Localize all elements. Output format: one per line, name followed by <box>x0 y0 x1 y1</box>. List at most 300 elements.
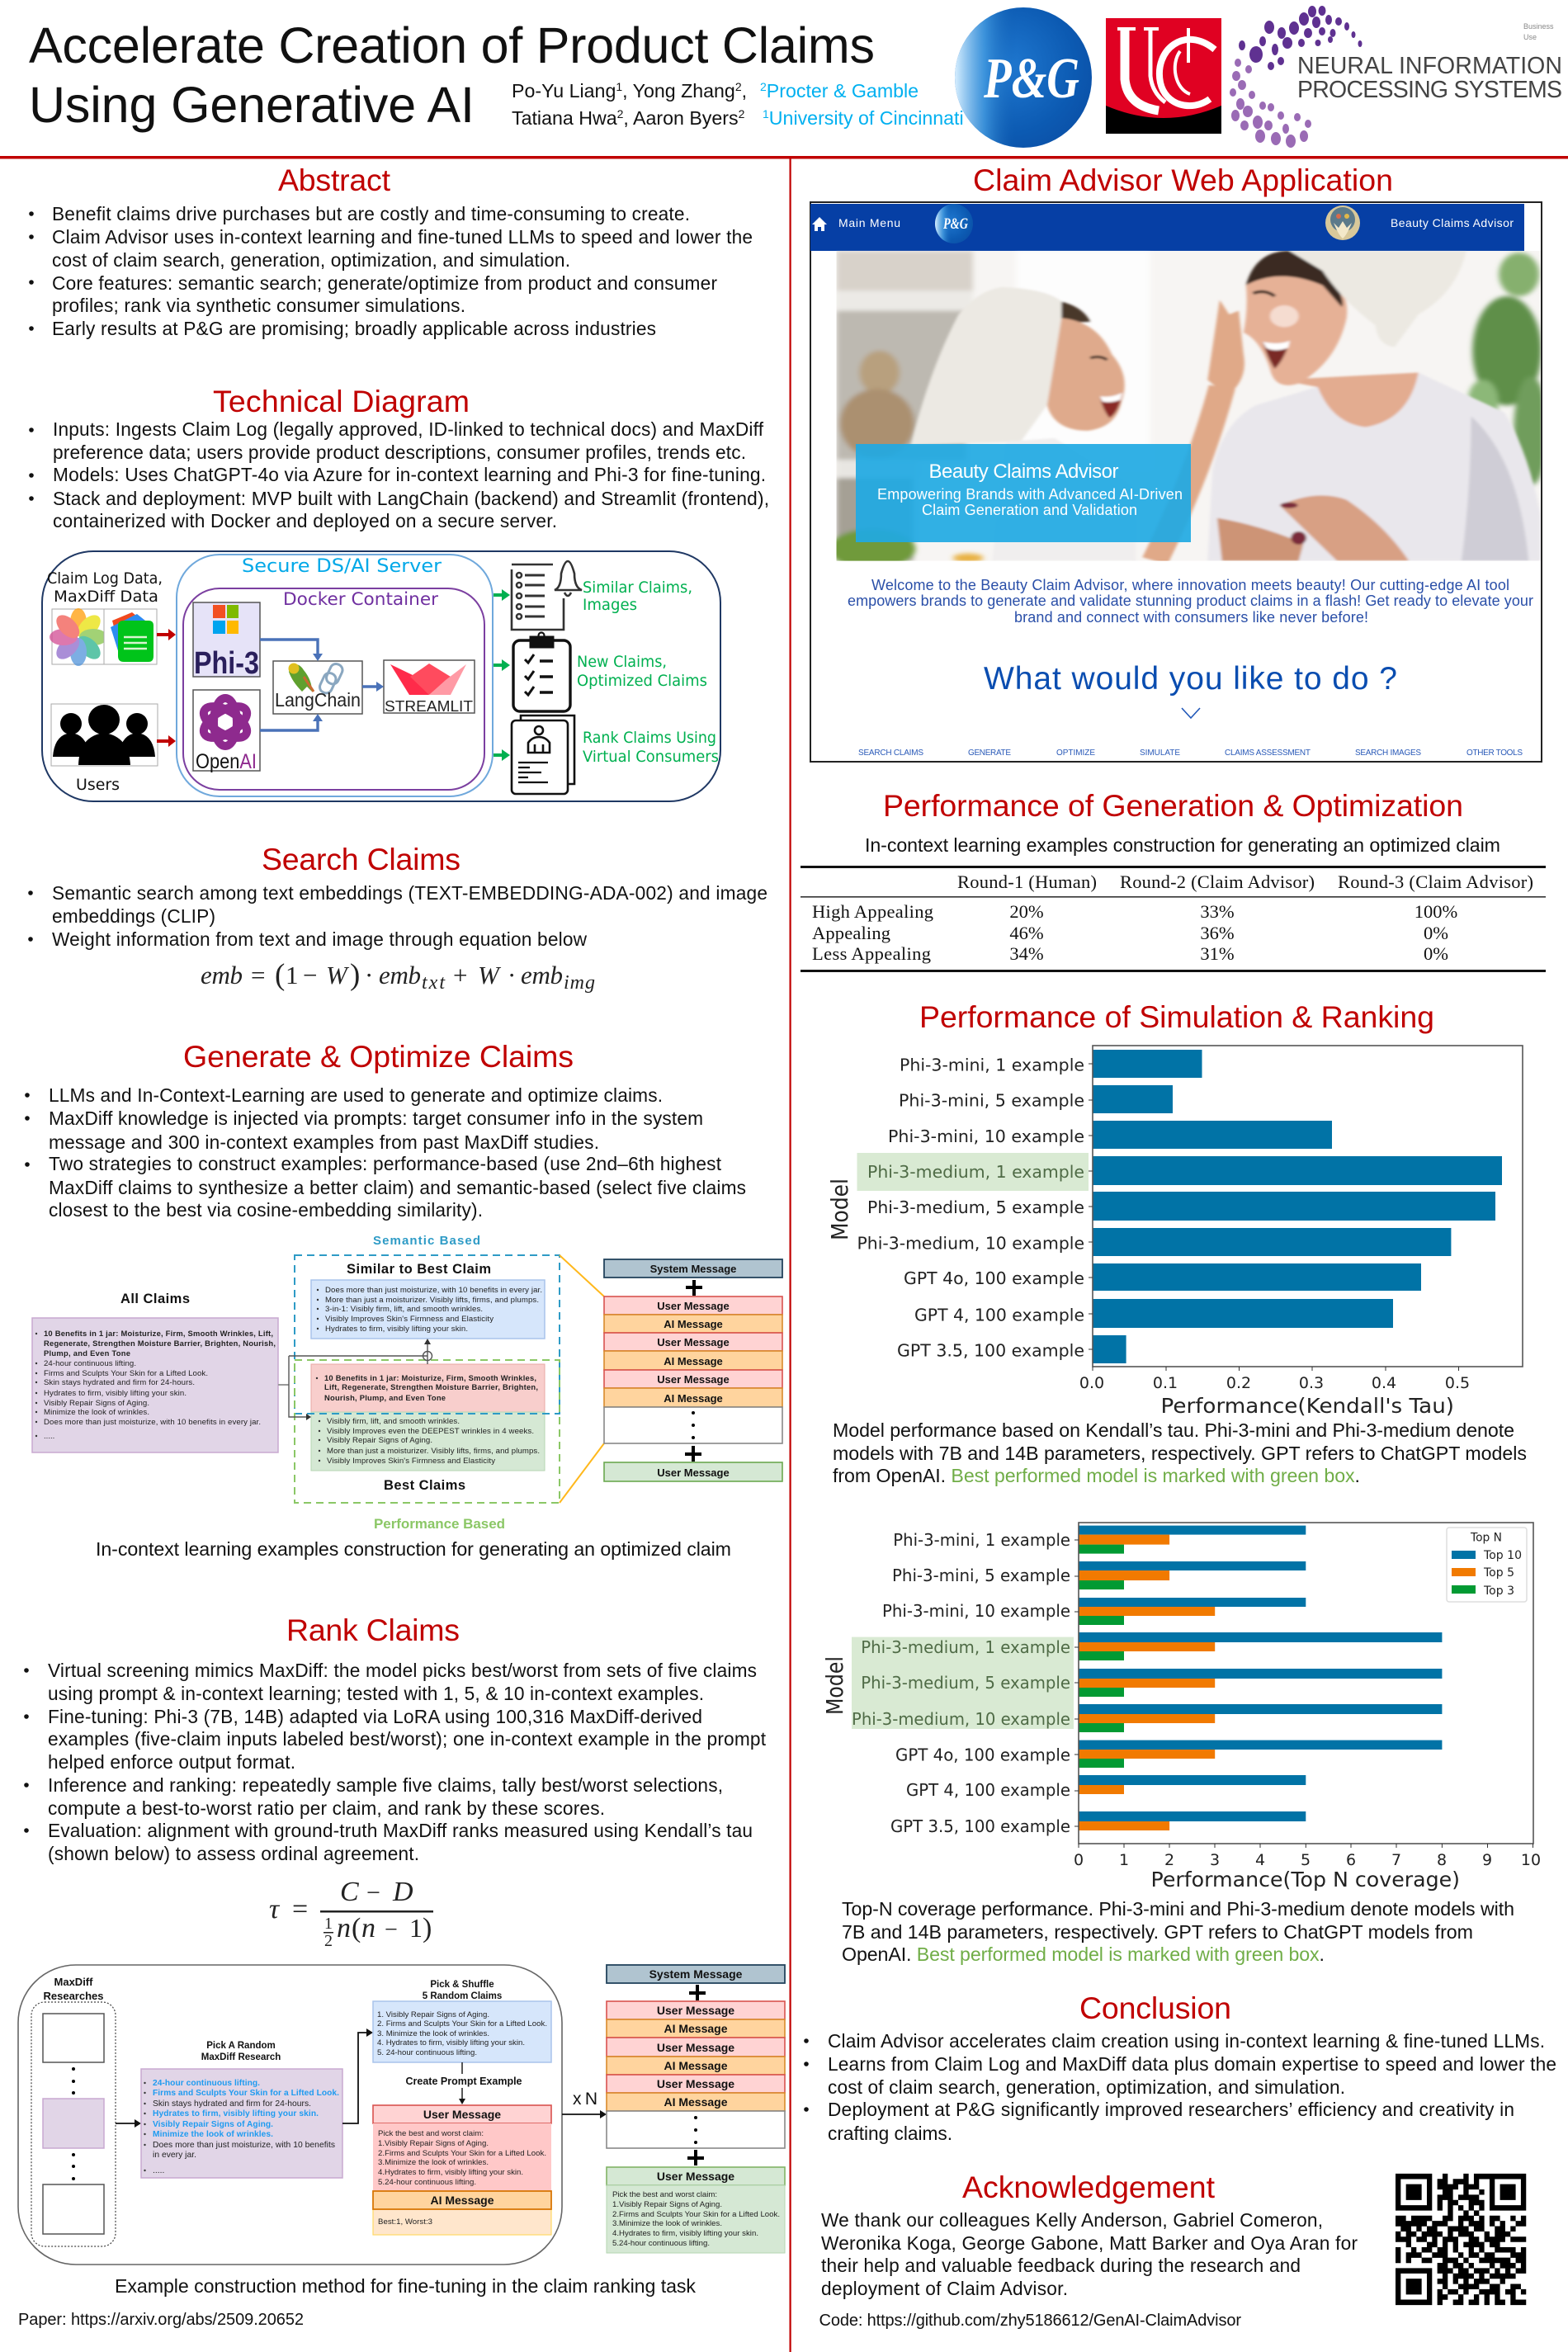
arrows: pipeline <box>260 640 384 730</box>
category labels: Phi-3-mini, 5 example <box>899 1091 1084 1111</box>
authors: 2 <box>760 80 767 93</box>
table: 0% <box>1424 943 1448 964</box>
text block: preference data; users provide product descriptions, consumer profiles, trends etc. <box>53 442 746 463</box>
label: pick and shuffle: Pick & Shuffle <box>430 1980 494 1990</box>
icon: photos <box>50 608 107 666</box>
equation: embedding <box>201 958 595 994</box>
authors: 1 <box>763 107 769 120</box>
category labels: Phi-3-mini, 1 example <box>900 1055 1084 1074</box>
text block: cost of claim search, generation, optimization, and simulation. <box>828 2076 1345 2098</box>
logo: NeurIPS <box>1230 6 1562 148</box>
equation: embedding: txt <box>422 972 446 994</box>
icon: users <box>51 704 158 766</box>
text block: Models: Uses ChatGPT-4o via Azure for in-context learning and Phi-3 for fine-tuning. <box>53 464 766 485</box>
icon: clipboard checklist <box>513 632 570 711</box>
docker label: Docker Container <box>283 589 438 609</box>
output labels: Virtual Consumers <box>583 748 719 766</box>
panel: prompt example: 1.Visibly Repair Signs of Aging. <box>378 2139 489 2148</box>
category labels: Phi-3-mini, 1 example <box>893 1530 1070 1550</box>
table: 31% <box>1200 943 1235 964</box>
legend: Top N <box>1470 1532 1502 1545</box>
category labels: Phi-3-medium, 10 example <box>852 1709 1070 1729</box>
logo: P&G <box>955 7 1092 148</box>
text block <box>804 2030 1556 2144</box>
callout: beauty claims advisor banner: Empowering Brands with Advanced AI-Driven <box>877 486 1183 503</box>
caption: Kendall's tau <box>833 1419 1527 1486</box>
best model highlight <box>857 1153 1089 1191</box>
caption: Top-N coverage <box>842 1898 1514 1965</box>
caption: Kendall's tau: models with 7B and 14B parameters, respectively. GPT refers to ChatGPT models <box>833 1443 1527 1464</box>
panel: acknowledgement <box>819 2170 1358 2330</box>
y axis title: Model <box>826 1178 853 1240</box>
message stack: 5.24-hour continuous lifting. <box>612 2239 710 2248</box>
caption: fine-tuning construction: Example construction method for fine-tuning in the claim ranking task <box>115 2275 696 2297</box>
text block: cost of claim search, generation, optimization, and simulation. <box>52 249 570 271</box>
equation: embedding: W <box>478 961 502 989</box>
table: Less Appealing <box>812 943 931 964</box>
message stack: 2.Firms and Sculpts Your Skin for a Lifted Look. <box>612 2210 780 2219</box>
equation: embedding: ) <box>350 958 360 992</box>
equation: embedding: · <box>365 961 373 989</box>
authors: 1 <box>616 80 622 93</box>
message stack <box>604 1259 782 1481</box>
equation: Kendall's tau: = <box>292 1894 308 1925</box>
x axis ticks: 1 <box>1119 1851 1129 1869</box>
icon: chevron <box>1182 708 1200 718</box>
text block: closest to the best via cosine-embedding similarity). <box>49 1199 483 1221</box>
authors: 2 <box>735 80 742 93</box>
app header bar <box>810 204 1524 251</box>
x axis ticks: 8 <box>1437 1851 1447 1869</box>
server label: Secure DS/AI Server <box>242 556 442 577</box>
equation: embedding: emb <box>201 961 243 989</box>
legend: Top 5 <box>1483 1566 1514 1580</box>
authors: 2 <box>617 107 624 120</box>
output labels: Images <box>583 596 637 614</box>
panel: all claims: Regenerate, Strengthen Moisture Barrier, Brighten, Nourish, <box>44 1339 276 1348</box>
QR code <box>1396 2176 1526 2302</box>
panel: all claims <box>32 1318 278 1452</box>
text block: Core features: semantic search; generate/optimize from product and consumer <box>52 272 717 294</box>
logo: NeurIPS: NEURAL INFORMATION <box>1297 53 1562 79</box>
text block <box>29 203 753 339</box>
table: Round-3 (Claim Advisor) <box>1338 871 1533 892</box>
text block: Deployment at P&G significantly improved researchers’ efficiency and creativity in <box>828 2099 1514 2120</box>
text block: profiles; rank via synthetic consumer simulations. <box>52 295 465 316</box>
equation: embedding: img <box>564 972 595 994</box>
message stack: AI Message <box>664 2059 728 2072</box>
icon: resume <box>512 716 574 794</box>
text block: Benefit claims drive purchases but are costly and time-consuming to create. <box>52 203 690 224</box>
category labels: Phi-3-medium, 10 example <box>857 1234 1084 1254</box>
chart: fine-tuning example construction <box>18 1965 785 2265</box>
performance label: Performance Based <box>374 1516 505 1532</box>
text block: compute a best-to-worst ratio per claim, and rank by these scores. <box>48 1797 605 1819</box>
app navigation: SEARCH IMAGES <box>1355 749 1421 758</box>
x axis ticks: 0.0 <box>1079 1374 1104 1392</box>
caption: Kendall's tau: Model performance based on Kendall’s tau. Phi-3-mini and Phi-3-medium denote <box>833 1419 1514 1441</box>
equation: Kendall's tau: τ <box>269 1894 281 1925</box>
panel: random research claims: Hydrates to firm, visibly lifting your skin. <box>153 2109 319 2118</box>
heading: Conclusion <box>1079 1991 1231 2025</box>
equation: Kendall's tau: 1 <box>409 1913 423 1943</box>
heading: Technical Diagram <box>213 384 470 418</box>
zoom lines <box>560 1255 604 1503</box>
equation: embedding: − <box>303 961 317 989</box>
x axis ticks: 4 <box>1255 1851 1265 1869</box>
authors: , Yong Zhang <box>622 80 735 102</box>
title: Accelerate Creation of Product Claims <box>29 17 875 73</box>
logo: P&G: P&G <box>983 47 1079 111</box>
text block: Learns from Claim Log and MaxDiff data plus domain expertise to speed and lower the <box>828 2053 1556 2075</box>
message stack: User Message <box>657 2004 734 2017</box>
panel: all claims: 10 Benefits in 1 jar: Moisturize, Firm, Smooth Wrinkles, Lift, <box>44 1329 273 1338</box>
panel: prompt example: 4.Hydrates to firm, visibly lifting your skin. <box>378 2168 523 2177</box>
panel: random research claims: in every jar. <box>153 2151 196 2160</box>
heading: Abstract <box>278 163 391 197</box>
table: 34% <box>1009 943 1044 964</box>
heading: Rank Claims <box>286 1613 460 1647</box>
panel: conclusion <box>804 1991 1556 2144</box>
text block: LLMs and In-Context-Learning are used to generate and optimize claims. <box>49 1084 663 1106</box>
panel: prompt example: Best:1, Worst:3 <box>378 2217 432 2227</box>
chart: technical architecture diagram <box>42 551 720 801</box>
output labels: Rank Claims Using <box>583 729 716 747</box>
logo: NeurIPS: PROCESSING SYSTEMS <box>1297 77 1562 103</box>
panel: best claim highlighted: Nourish, Plump, and Even Tone <box>324 1393 446 1402</box>
message stack: AI Message <box>664 1392 723 1405</box>
panel: five random claims <box>373 2001 551 2062</box>
legend <box>1447 1528 1527 1602</box>
text block: Claim Advisor accelerates claim creation using in-context learning & fine-tuned LLMs. <box>828 2030 1545 2052</box>
table: 33% <box>1200 901 1235 922</box>
x axis ticks: 0.1 <box>1153 1374 1178 1392</box>
equation: Kendall's tau <box>269 1877 433 1950</box>
x axis ticks: 9 <box>1482 1851 1492 1869</box>
welcome text <box>848 577 1533 626</box>
panel: all claims: 24-hour continuous lifting. <box>44 1359 136 1368</box>
panel: search claims <box>28 842 767 994</box>
equation: Kendall's tau: C <box>340 1877 359 1907</box>
label: pick a random <box>201 2041 281 2062</box>
text block: Evaluation: alignment with ground-truth MaxDiff ranks measured using Kendall’s tau <box>48 1820 753 1841</box>
panel: best claims: Best Claims <box>384 1478 465 1493</box>
series: Top 3 <box>1079 1545 1124 1768</box>
panel: rank claims <box>24 1613 767 1950</box>
message stack: User Message <box>657 2077 734 2090</box>
output labels: New Claims, <box>577 653 667 671</box>
x axis title: Performance(Top N coverage) <box>1150 1868 1460 1892</box>
heading: Search Claims <box>262 842 460 876</box>
bar chart: Kendall's tau <box>826 1046 1523 1418</box>
component: Streamlit <box>384 660 475 715</box>
category labels: Phi-3-mini, 10 example <box>882 1601 1070 1621</box>
message stack: Pick the best and worst claim: <box>612 2190 717 2199</box>
message stack: System Message <box>649 1967 743 1981</box>
title: Using Generative AI <box>29 77 475 133</box>
semantic label: Semantic Based <box>373 1234 480 1248</box>
text block <box>28 882 767 950</box>
arrow: times N <box>562 2090 607 2118</box>
component: OpenAI: OpenAI <box>196 750 257 773</box>
arrows: inputs <box>157 629 176 747</box>
table: Round-2 (Claim Advisor) <box>1120 871 1315 892</box>
app navigation: CLAIMS ASSESSMENT <box>1225 749 1311 758</box>
arrow: to shuffled claims <box>342 2028 373 2123</box>
icon: emblem <box>1325 205 1360 240</box>
panel: similar to best claim <box>311 1262 545 1339</box>
x axis ticks: 2 <box>1164 1851 1174 1869</box>
text block: Early results at P&G are promising; broadly applicable across industries <box>52 318 656 339</box>
text block: MaxDiff knowledge is injected via prompts: target consumer info in the system <box>49 1108 703 1129</box>
arrow: create prompt example <box>406 2062 522 2104</box>
panel: five random claims: 4. Hydrates to firm, visibly lifting your skin. <box>377 2038 525 2047</box>
table <box>801 866 1546 972</box>
panel: random research claims: 24-hour continuous lifting. <box>153 2079 260 2088</box>
category labels: GPT 4o, 100 example <box>904 1268 1084 1288</box>
message stack: User Message <box>657 1373 730 1386</box>
text block: MaxDiff claims to synthesize a better claim) and semantic-based (select five claims <box>49 1177 746 1198</box>
equation: Kendall's tau: 1 <box>324 1915 333 1933</box>
text block <box>821 2209 1358 2299</box>
equation: Kendall's tau: − <box>385 1917 398 1943</box>
screenshot frame <box>810 202 1542 762</box>
category labels <box>852 1530 1070 1836</box>
x axis ticks: 0 <box>1074 1851 1084 1869</box>
message stack: System Message <box>650 1263 736 1275</box>
panel: performance of generation and optimization <box>801 788 1546 972</box>
heading: Performance of Generation & Optimization <box>883 788 1463 823</box>
panel: prompt example: Pick the best and worst claim: <box>378 2129 484 2138</box>
category labels: Phi-3-medium, 1 example <box>867 1162 1084 1182</box>
caption: Top-N coverage: OpenAI. Best performed model is marked with green box. <box>842 1943 1325 1965</box>
text block: containerized with Docker and deployed on a secure server. <box>53 510 557 531</box>
x axis title: Performance(Kendall's Tau) <box>1160 1394 1454 1418</box>
panel: similar to best claim: Similar to Best Claim <box>347 1262 491 1277</box>
message stack: 3.Minimize the look of wrinkles. <box>612 2219 722 2228</box>
authors: 2 <box>739 107 745 120</box>
panel: random research claims: Minimize the look of wrinkles. <box>153 2130 273 2139</box>
equation: embedding: ( <box>275 958 285 992</box>
panel: best claims: Visibly Improves Skin's Firmness and Elasticity <box>327 1457 495 1466</box>
x axis ticks: 7 <box>1391 1851 1401 1869</box>
text block: Weronika Koga, George Gabone, Matt Barker and Oya Aran for <box>821 2232 1358 2254</box>
panel: similar to best claim: Visibly Improves Skin's Firmness and Elasticity <box>325 1315 494 1324</box>
x axis ticks: 10 <box>1521 1851 1541 1869</box>
panel: similar to best claim: Does more than just moisturize, with 10 benefits in every jar. <box>325 1286 542 1295</box>
callout: beauty claims advisor banner: Claim Generation and Validation <box>922 502 1137 518</box>
message stack: AI Message <box>664 2095 728 2109</box>
output labels <box>577 579 719 766</box>
icon: documents <box>104 609 157 664</box>
panel: random research claims: Skin stays hydrated and firm for 24-hours. <box>153 2099 311 2109</box>
category labels <box>857 1055 1084 1361</box>
app navigation: OTHER TOOLS <box>1466 749 1523 758</box>
icon: list with bell <box>512 561 582 630</box>
panel: five random claims: 1. Visibly Repair Signs of Aging. <box>377 2010 489 2019</box>
data label: Claim Log Data, <box>47 569 163 588</box>
message stack: 1.Visibly Repair Signs of Aging. <box>612 2200 722 2209</box>
dashed selection frames <box>295 1255 560 1503</box>
label: pick and shuffle <box>423 1980 502 2001</box>
x axis ticks: 6 <box>1346 1851 1356 1869</box>
text block: using prompt & in-context learning; tested with 1, 5, & 10 in-context examples. <box>48 1683 704 1704</box>
prompt heading: What would you like to do ? <box>984 661 1397 697</box>
text block: Two strategies to construct examples: performance-based (use 2nd–6th highest <box>49 1153 722 1174</box>
message stack: User Message <box>657 1466 730 1479</box>
equation: Kendall's tau: n <box>337 1913 351 1943</box>
x axis ticks: 0.3 <box>1299 1374 1324 1392</box>
authors: , <box>742 80 747 102</box>
arrow: pick research <box>116 2119 141 2128</box>
panel: random research claims: ..... <box>153 2166 164 2175</box>
heading: Acknowledgement <box>962 2170 1216 2204</box>
caption: Top-N coverage: Top-N coverage performance. Phi-3-mini and Phi-3-medium denote models with <box>842 1898 1514 1920</box>
caption: Top-N coverage: 7B and 14B parameters, respectively. GPT refers to ChatGPT models from <box>842 1921 1473 1943</box>
authors: University of Cincinnati <box>769 107 964 129</box>
label: MaxDiff researches <box>43 1976 104 2002</box>
category labels: Phi-3-mini, 10 example <box>888 1126 1084 1146</box>
panel: best claims: Visibly Improves even the DEEPEST wrinkles in 4 weeks. <box>327 1427 534 1436</box>
message stack <box>607 1965 785 2253</box>
text block: Weight information from text and image through equation below <box>52 928 588 950</box>
x axis ticks: 5 <box>1301 1851 1311 1869</box>
panel: all claims: Hydrates to firm, visibly lifting your skin. <box>44 1389 187 1398</box>
text block: Stack and deployment: MVP built with LangChain (backend) and Streamlit (frontend), <box>53 488 769 509</box>
category labels: Phi-3-medium, 5 example <box>861 1673 1070 1693</box>
panel: all claims: Does more than just moisturize, with 10 benefits in every jar. <box>44 1418 261 1427</box>
equation: embedding: + <box>453 961 467 989</box>
equation: Kendall's tau: D <box>392 1877 413 1907</box>
photo: mother and daughter <box>829 251 1548 569</box>
category labels: GPT 3.5, 100 example <box>890 1816 1070 1836</box>
panel: prompt example <box>373 2105 551 2235</box>
welcome text: empowers brands to generate and validate stunning product claims in a flash! Get ready to elevate your <box>848 593 1533 609</box>
panel: prompt example: User Message <box>423 2108 501 2121</box>
table: 46% <box>1009 923 1044 943</box>
icon: home <box>812 217 827 231</box>
caption: Kendall's tau: from OpenAI. Best performed model is marked with green box. <box>833 1465 1360 1486</box>
equation: Kendall's tau: ( <box>352 1913 361 1943</box>
panel: best claims <box>311 1412 545 1493</box>
text block <box>24 1660 767 1864</box>
legend: Top 3 <box>1483 1585 1514 1598</box>
category labels: Phi-3-mini, 5 example <box>892 1566 1070 1585</box>
chart: in-context example construction <box>32 1234 782 1532</box>
code link: Code: https://github.com/zhy5186612/GenAI-ClaimAdvisor <box>819 2312 1241 2330</box>
text block: embeddings (CLIP) <box>52 905 215 927</box>
authors: Po-Yu Liang <box>512 80 616 102</box>
panel: random research claims: Firms and Sculpts Your Skin for a Lifted Look. <box>153 2089 339 2098</box>
text block <box>29 418 769 531</box>
connector arrows <box>278 1339 432 1420</box>
panel: best claim highlighted <box>311 1364 545 1412</box>
table: Appealing <box>812 923 890 943</box>
table: 100% <box>1415 901 1457 922</box>
panel: prompt example: AI Message <box>430 2194 494 2207</box>
text block: crafting claims. <box>828 2123 952 2144</box>
x axis ticks: 3 <box>1210 1851 1220 1869</box>
category labels: GPT 4, 100 example <box>914 1306 1084 1325</box>
message stack: 4.Hydrates to firm, visibly lifting your skin. <box>612 2229 758 2238</box>
caption: In-context learning examples construction for generating an optimized claim <box>865 834 1500 856</box>
arrow: times N: x N <box>573 2090 597 2109</box>
series: Top 10 <box>1079 1526 1442 1821</box>
logo: University of Cincinnati <box>1106 18 1221 134</box>
text block: Inference and ranking: repeatedly sample five claims, tally best/worst selections, <box>48 1774 723 1796</box>
logo: NeurIPS: Use <box>1523 33 1537 41</box>
panel: all claims: Plump, and Even Tone <box>44 1348 130 1358</box>
authors: Procter & Gamble <box>767 80 919 102</box>
panel: similar to best claim: More than just a moisturizer. Visibly lifts, firms, and plumps. <box>325 1296 539 1305</box>
arrows: outputs <box>494 589 510 761</box>
panel: abstract <box>29 163 753 339</box>
data label: MaxDiff Data <box>54 588 158 606</box>
panel: five random claims: 3. Minimize the look of wrinkles. <box>377 2029 489 2038</box>
text block: Claim Advisor uses in-context learning and fine-tuned LLMs to speed and lower the <box>52 226 753 248</box>
component: OpenAI <box>193 690 260 773</box>
label: pick and shuffle: 5 Random Claims <box>423 1991 502 2001</box>
category labels: Phi-3-medium, 1 example <box>861 1637 1070 1657</box>
app header bar: Beauty Claims Advisor <box>1391 216 1514 229</box>
x axis ticks: 0.2 <box>1226 1374 1251 1392</box>
equation: embedding: · <box>508 961 516 989</box>
title <box>29 17 875 133</box>
category labels: GPT 3.5, 100 example <box>897 1341 1084 1361</box>
message stack: User Message <box>657 2041 734 2054</box>
panel: random research claims: Does more than just moisturize, with 10 benefits <box>153 2141 335 2150</box>
equation: Kendall's tau: ) <box>423 1913 432 1943</box>
x axis ticks <box>1079 1064 1470 1392</box>
component: Phi-3: Phi-3 <box>194 646 259 681</box>
app navigation: SIMULATE <box>1140 749 1180 758</box>
panel: all claims: Skin stays hydrated and firm for 24-hours. <box>44 1378 195 1387</box>
panel: all claims: Visibly Repair Signs of Aging. <box>44 1399 149 1408</box>
heading: Generate & Optimize Claims <box>183 1039 574 1074</box>
table: 36% <box>1200 923 1235 943</box>
x axis ticks: 0.4 <box>1372 1374 1396 1392</box>
panel: similar to best claim: Hydrates to firm, visibly lifting your skin. <box>325 1325 468 1334</box>
panel: best claims: More than just a moisturizer. Visibly lifts, firms, and plumps. <box>327 1447 540 1456</box>
app navigation: OPTIMIZE <box>1056 749 1095 758</box>
all claims heading: All Claims <box>120 1292 190 1306</box>
panel: all claims: Firms and Sculpts Your Skin for a Lifted Look. <box>44 1369 208 1378</box>
panel: best claims: Visibly firm, lift, and smooth wrinkles. <box>327 1417 460 1426</box>
authors: Tatiana Hwa <box>512 107 617 129</box>
panel: random research claims <box>141 2069 342 2178</box>
equation: Kendall's tau: − <box>366 1879 380 1906</box>
bar chart: Top-N coverage <box>821 1523 1541 1892</box>
welcome text: brand and connect with consumers like never before! <box>1014 609 1368 626</box>
best model highlight <box>852 1637 1074 1729</box>
app navigation <box>858 749 1523 758</box>
heading: Claim Advisor Web Application <box>973 163 1393 197</box>
message stack: AI Message <box>664 2022 728 2035</box>
equation: embedding: W <box>326 961 350 989</box>
component: Phi-3 <box>193 602 260 681</box>
panel: best claims: Visibly Repair Signs of Aging. <box>327 1436 432 1445</box>
panel: similar to best claim: 3-in-1: Visibly firm, lift, and smooth wrinkles. <box>325 1305 483 1314</box>
callout: beauty claims advisor banner: Beauty Claims Advisor <box>929 460 1119 483</box>
table: Round-1 (Human) <box>957 871 1097 892</box>
text block: Inputs: Ingests Claim Log (legally approved, ID-linked to technical docs) and MaxDiff <box>53 418 764 440</box>
equation: embedding: 1 <box>286 961 299 989</box>
app navigation: GENERATE <box>968 749 1011 758</box>
heading: performance of simulation and ranking: Performance of Simulation & Ranking <box>919 999 1434 1034</box>
equation: embedding: emb <box>379 961 421 989</box>
label: MaxDiff researches: Researches <box>43 1990 104 2002</box>
table: 20% <box>1009 901 1044 922</box>
